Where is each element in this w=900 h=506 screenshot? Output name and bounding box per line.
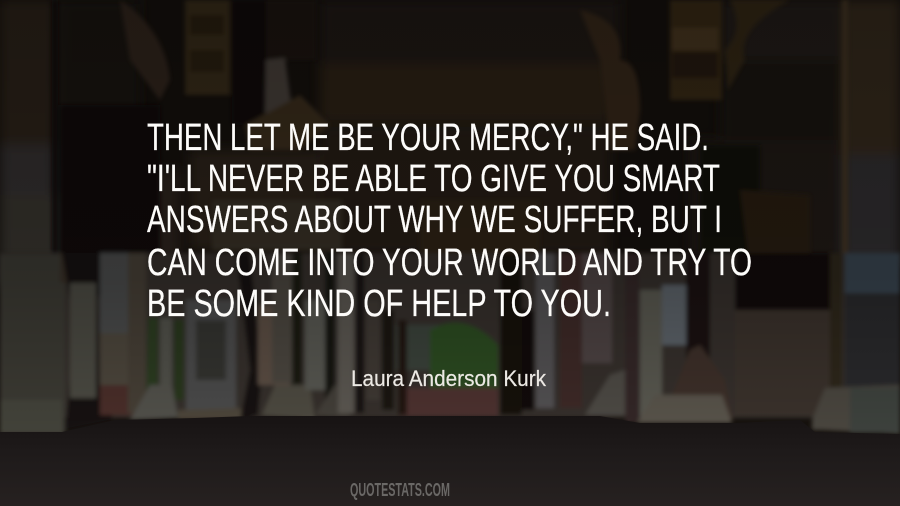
lower colonnade base <box>0 253 900 418</box>
quote text: THEN LET ME BE YOUR MERCY," HE SAID. <box>147 117 709 159</box>
quote text <box>147 117 752 325</box>
watermark: QUOTESTATS.COM <box>350 480 450 500</box>
stone floor <box>0 416 900 506</box>
author name: Laura Anderson Kurk <box>351 366 547 391</box>
upper columns and carved arches <box>185 0 230 95</box>
quote text: BE SOME KIND OF HELP TO YOU. <box>147 283 611 325</box>
